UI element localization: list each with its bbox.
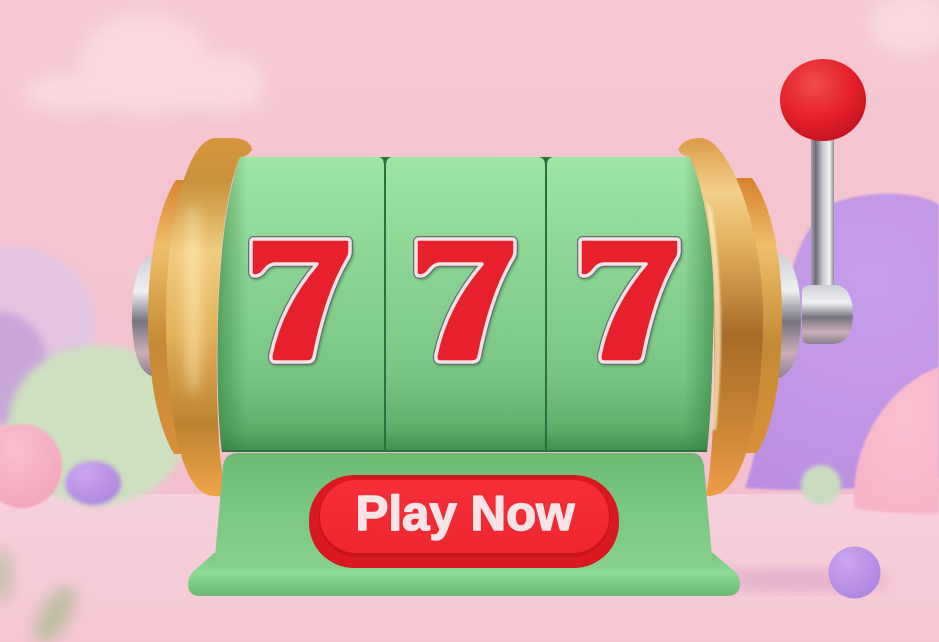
blurred foreground plant [0,547,83,642]
reel edge shading [217,157,714,450]
reel 2 [386,157,545,450]
small lilac ball [828,546,880,598]
background cloud right [870,0,939,54]
reel seam backing [218,157,714,452]
background orbs left [0,246,188,508]
play now button [309,475,619,568]
right gold rings [678,138,782,496]
background wall [0,0,939,500]
lever knob [780,59,866,141]
lever arm [811,135,834,297]
lever joint [802,285,853,344]
number 7 right [580,239,680,364]
stand body [214,453,713,568]
reel 1 [217,157,384,450]
background orbs right [745,194,939,514]
left hub [132,255,152,376]
reels [217,157,714,452]
background floor [0,494,939,642]
left gold rings [148,138,252,496]
button label: Play Now [356,487,575,541]
number 7 left [251,239,352,364]
lever [780,59,866,344]
plinth [188,553,740,596]
number 7 middle [416,239,516,364]
base stand [188,453,740,596]
machine shadow [710,570,890,590]
reel 3 [547,157,714,450]
background cloud left [24,14,265,114]
right hub [778,253,801,378]
